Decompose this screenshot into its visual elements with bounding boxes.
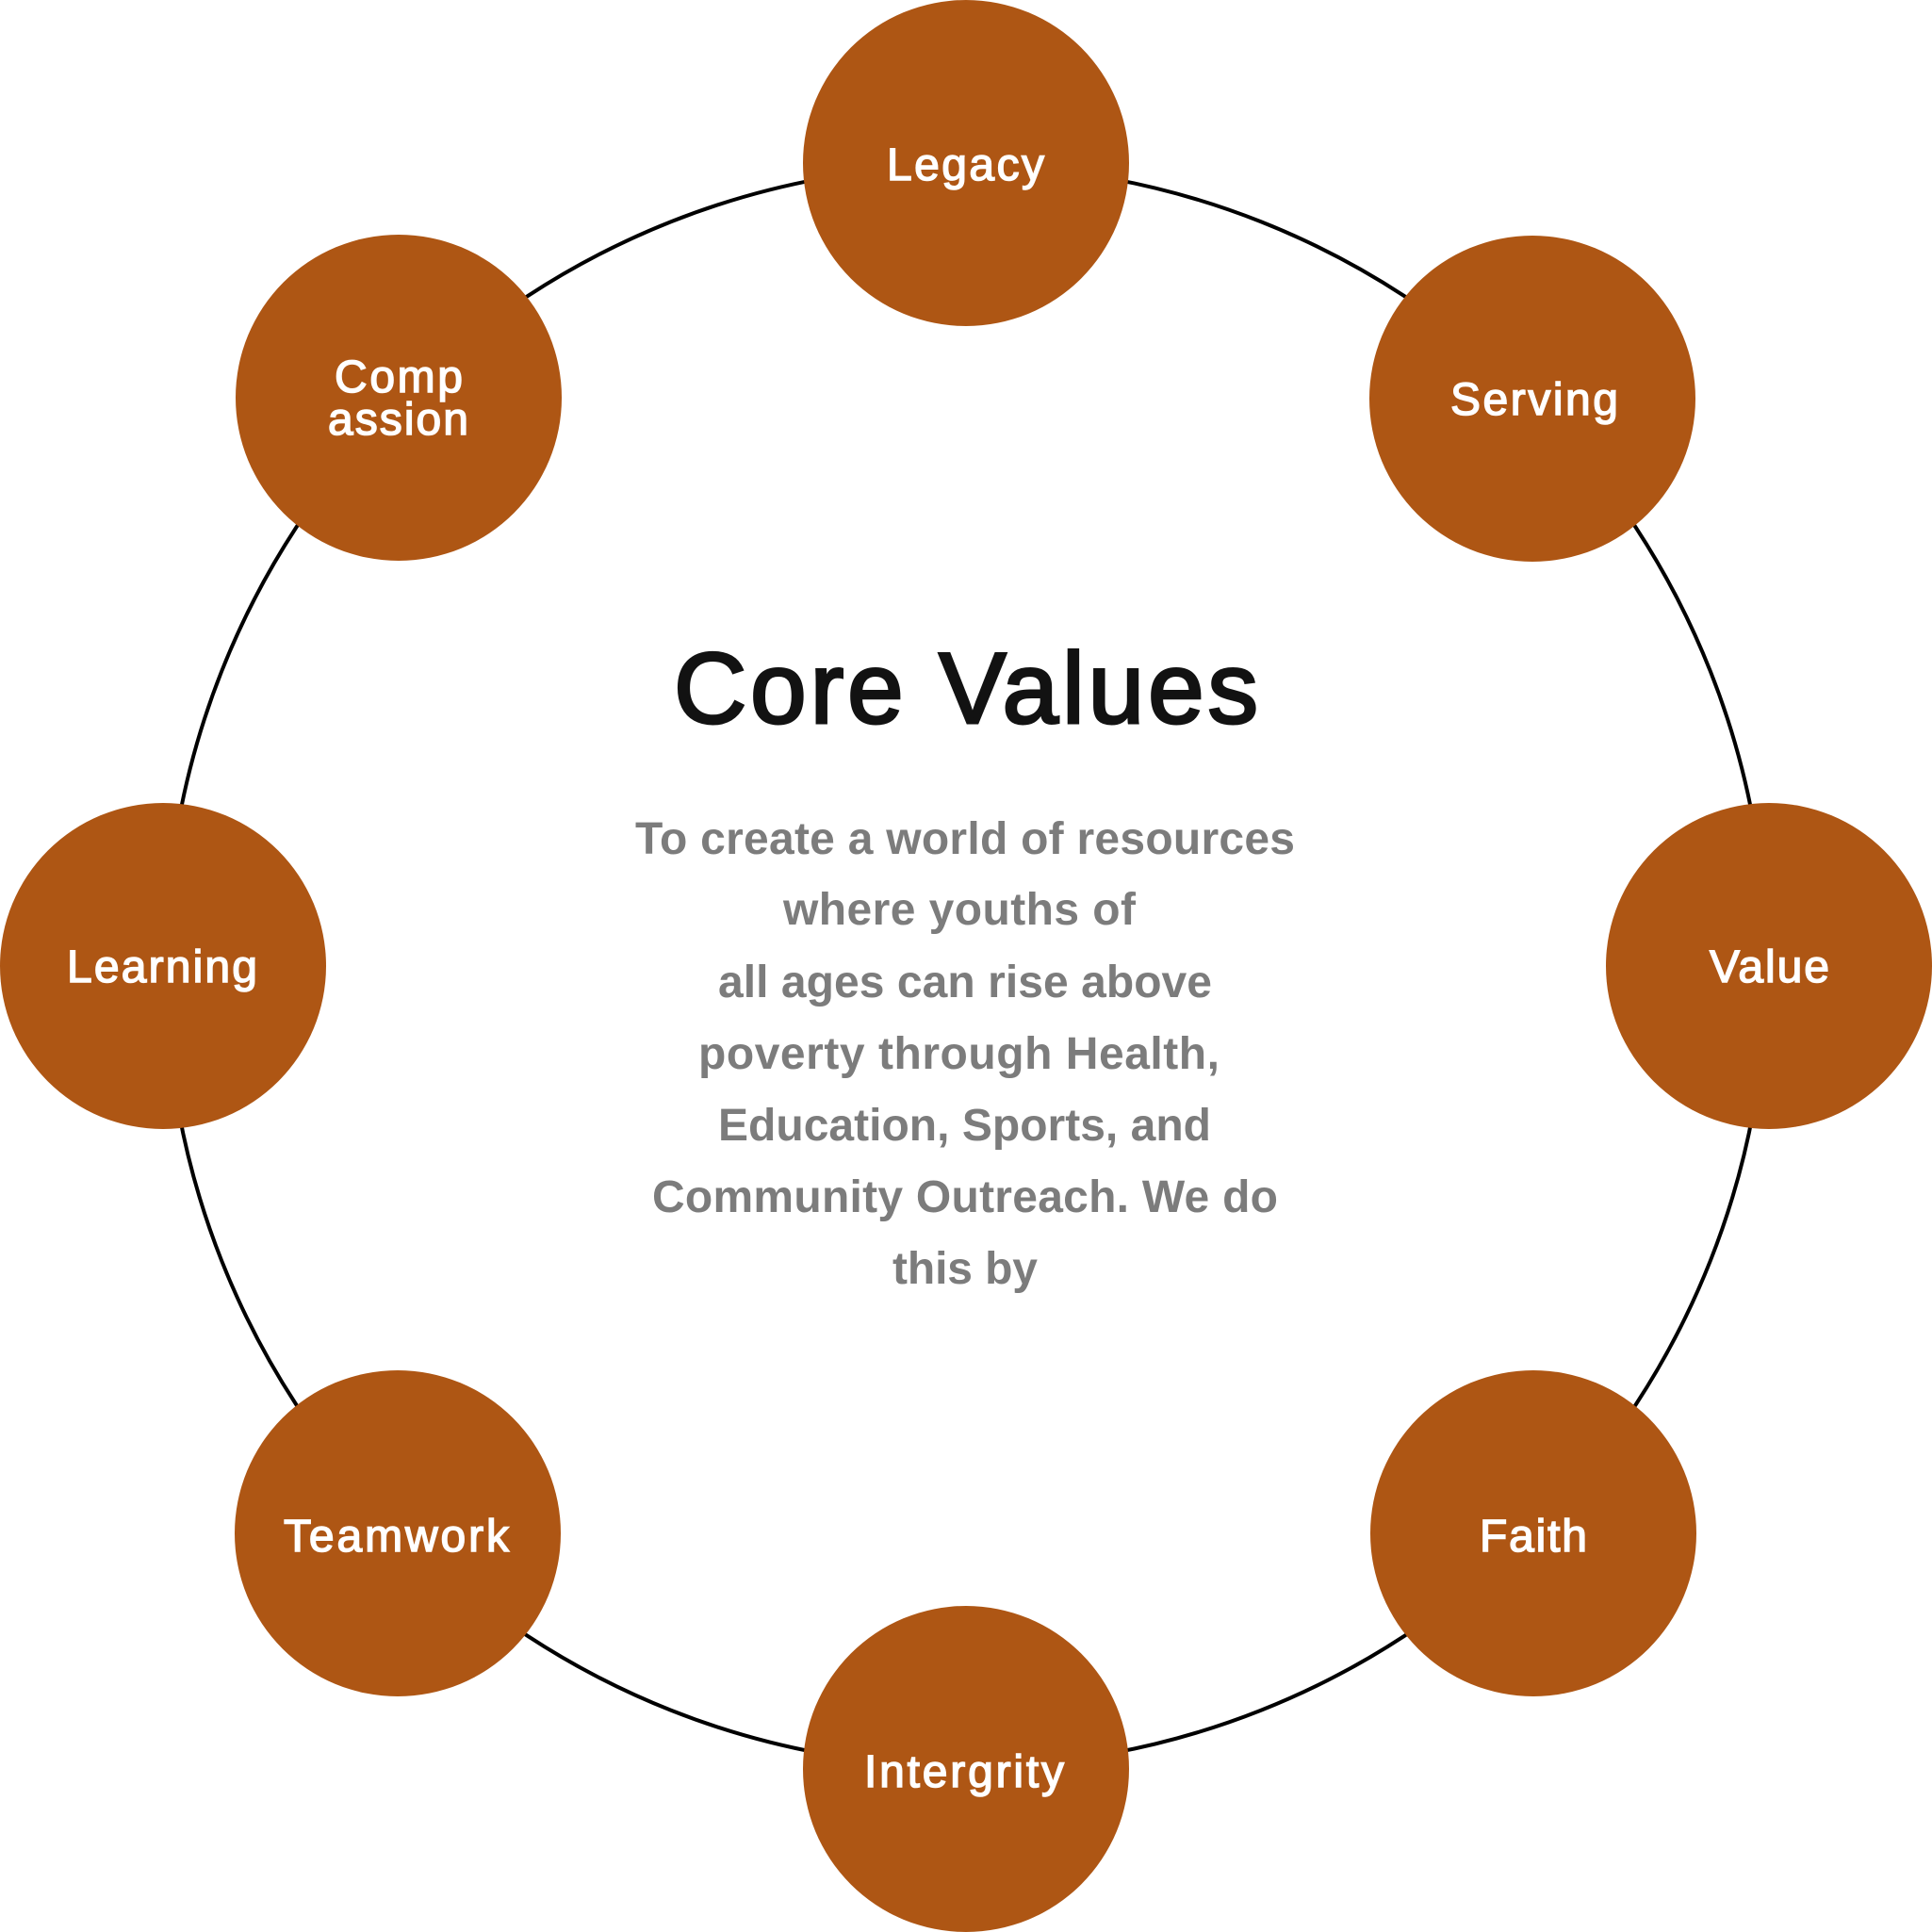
mission text block: where youths of xyxy=(782,885,1137,935)
title: Core Values xyxy=(674,631,1258,745)
node: Value xyxy=(1606,803,1932,1129)
node: Compassion: assion xyxy=(328,395,468,445)
mission text block: Community Outreach. We do xyxy=(652,1172,1278,1222)
node: Legacy xyxy=(803,0,1129,326)
mission text block: To create a world of resources xyxy=(635,814,1295,864)
node: Learning: Learning xyxy=(67,942,257,992)
node: Legacy: Legacy xyxy=(887,140,1044,190)
node: Intergrity xyxy=(803,1606,1129,1932)
mission text block xyxy=(635,814,1295,1294)
node: Serving: Serving xyxy=(1450,375,1618,425)
mission text block: all ages can rise above xyxy=(718,958,1212,1007)
mission text block: Education, Sports, and xyxy=(718,1101,1211,1151)
node: Serving xyxy=(1369,236,1695,562)
mission text block: this by xyxy=(892,1244,1038,1294)
node: Value: Value xyxy=(1710,942,1829,992)
node: Intergrity: Intergrity xyxy=(864,1747,1064,1797)
connecting ring xyxy=(166,166,1766,1766)
mission text block: poverty through Health, xyxy=(698,1029,1220,1079)
node: Faith xyxy=(1370,1370,1696,1696)
node: Teamwork: Teamwork xyxy=(284,1512,510,1562)
node: Compassion xyxy=(236,235,562,561)
node: Compassion: Comp xyxy=(335,352,463,402)
node: Learning xyxy=(0,803,326,1129)
node: Faith: Faith xyxy=(1480,1512,1587,1562)
node: Teamwork xyxy=(235,1370,561,1696)
